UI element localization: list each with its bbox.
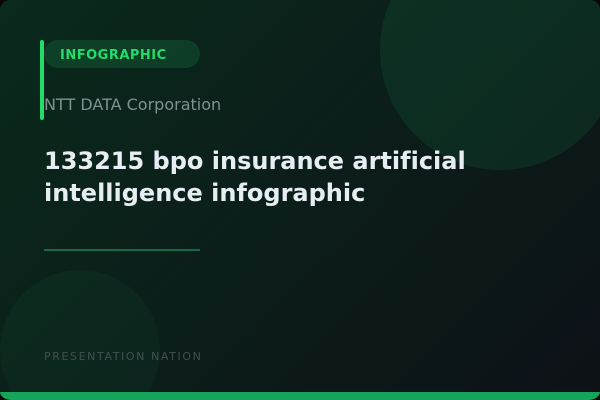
title: intelligence infographic [44,179,365,207]
title: 133215 bpo insurance artificial [44,147,466,175]
title [44,147,466,207]
divider [44,249,200,251]
company name: NTT DATA Corporation [44,95,221,114]
decorative circle: top right [380,0,600,170]
badge [44,40,200,68]
footer source: PRESENTATION NATION [44,350,202,363]
bottom accent bar [0,392,600,400]
badge label: INFOGRAPHIC [60,48,167,63]
left accent bar [40,40,44,120]
badge pill [44,40,200,68]
decorative circle: bottom left [0,270,160,392]
